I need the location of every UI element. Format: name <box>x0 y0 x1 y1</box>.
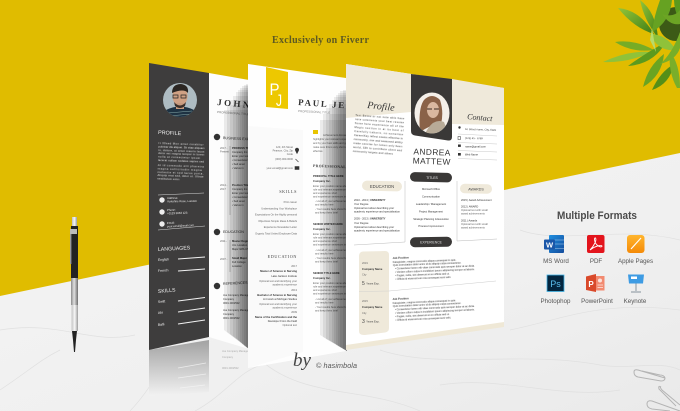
profile text <box>353 113 405 156</box>
section: business experience: • Varius in <box>232 203 244 207</box>
education entries: Your Degree <box>354 221 369 225</box>
section: references: 0601 4002502 <box>223 316 240 320</box>
resume: John (dark sidebar) <box>149 63 248 350</box>
education list: Optional text and identifying your <box>259 302 297 306</box>
education list: 2013 <box>291 288 298 292</box>
section: business experience: BUSINESS EXPERIENCE <box>223 136 266 142</box>
experience year panel: Company Name <box>362 305 383 309</box>
job entry 2: • Fugiat, nulla, sint deserunt et ex officia sed ut. <box>395 312 450 318</box>
section: business experience: PROFESS TITLE <box>232 146 253 150</box>
experience entries: - Your results here show the <box>315 207 348 211</box>
sidebar tint <box>248 126 303 368</box>
titles list: Microsoft Office <box>422 187 441 191</box>
icon: MS Word: W <box>546 240 554 250</box>
section: education: EDUCATION <box>223 230 244 234</box>
frame lines <box>354 181 497 245</box>
label: PowerPoint: PowerPoint <box>581 298 613 305</box>
experience entries: Company Inc. <box>313 276 331 280</box>
section: education: Major GPA 3.5 <box>232 247 249 251</box>
awards entries: 2015 | Award Achievement <box>461 198 492 202</box>
profile text: vestibulum enim <box>157 177 180 181</box>
label: Keynote: Keynote <box>624 298 647 305</box>
main column of John resume <box>214 99 248 319</box>
section: business experience: Enter your text <box>232 154 249 158</box>
contact block <box>158 193 205 230</box>
heading: professional experience: PROFESSIONAL EXPERIENCE <box>313 164 375 170</box>
contact list <box>458 126 497 160</box>
section: education <box>214 229 251 272</box>
experience year panel: 5 <box>362 281 365 287</box>
resume: Paul (yellow tab) <box>248 64 347 368</box>
monogram J: J <box>276 91 282 110</box>
faint reflection of John resume text <box>222 349 249 370</box>
profile text: Magic section in at its best of <box>354 125 404 132</box>
section: education: Full College <box>232 260 246 264</box>
job entry 1: • Fugiat, nulla, sint deserunt et ex officia sed ut. <box>395 272 450 277</box>
signature: © hasimbola <box>316 361 357 370</box>
section: business experience: Company Inc. <box>232 150 248 154</box>
language bars <box>158 257 205 273</box>
experience entries: and keep them brief <box>315 210 338 214</box>
experience entries: Enter your position name about your <box>313 281 355 285</box>
job entry 2: • Consectetur lorem elit vitae commodo quis semper dolor at ac dicta. <box>395 304 475 311</box>
signature <box>293 350 357 371</box>
label: Photoshop: Photophop <box>541 298 571 305</box>
experience year panel: City <box>362 311 367 315</box>
section: education: Uni. Location <box>232 243 248 247</box>
portrait of Andrea <box>414 92 450 134</box>
language bars: English <box>158 257 169 262</box>
page shadow on John resume <box>224 84 249 349</box>
heading: education: EDUCATION <box>268 254 297 259</box>
job entry 1: Quis exercitation dolor anim id do aliquip culpa consectetur. <box>393 261 462 267</box>
profile text: nulla at consectetur ipsum <box>158 155 201 160</box>
job entry 1 <box>393 253 475 281</box>
profile text: Text Below or not note able have <box>355 113 405 121</box>
address: Address: <box>167 196 178 200</box>
titles list: Leadership / Management <box>416 202 446 206</box>
section: business experience: • Sed amet <box>232 162 245 166</box>
awards entries: award achievements <box>461 226 485 230</box>
profile text: pulvinar dis aliquet. Sit vitae aliquam <box>158 144 205 150</box>
profile text: in, dolore, ut amet mauris lacus <box>158 148 205 153</box>
section: education: 2007 - <box>220 257 227 261</box>
experience entries: and results here <box>315 252 334 256</box>
experience entries: and experience short <box>313 288 338 292</box>
experience entries: and experience short <box>313 191 338 195</box>
education entries: academic experience and specialization <box>354 228 400 232</box>
cream header band left <box>346 64 411 118</box>
contact details: Pearson, City, Zip <box>273 148 294 152</box>
job entry 1: Job Position <box>393 255 409 260</box>
pill: titles <box>410 172 452 183</box>
section: education: 2011 - <box>220 239 227 243</box>
plant <box>603 0 680 90</box>
page sheet <box>346 64 504 346</box>
education list: 2017 <box>291 264 298 268</box>
experience entries: Enter your position name about your <box>313 184 355 188</box>
titles list <box>413 187 449 228</box>
profile text: magna sollicitudin magna <box>158 166 202 172</box>
experience entries: and results here <box>315 300 334 304</box>
cream bottom strip <box>346 322 504 350</box>
section: references: Company <box>223 297 235 301</box>
experience year panel: City <box>362 272 367 276</box>
heading: contact: Contact <box>467 112 494 123</box>
heading: skills: SKILLS <box>158 287 176 295</box>
experience entries: - List all of your achievements <box>315 297 350 301</box>
job entry 1: • Veniam cillum culpa in incididunt ipsum adipiscing tempor at laboris. <box>395 267 475 274</box>
education list: At it work at Michigan Studies <box>263 297 298 301</box>
experience year panel: Years Exp. <box>366 282 380 286</box>
education list: academic experience <box>272 306 298 310</box>
experience entries: role and relevant experience here <box>313 188 352 192</box>
contact list: name@gmail.com <box>465 144 486 148</box>
language bars: French <box>158 268 169 273</box>
summary <box>313 134 346 152</box>
skills list: Organic Total United Employee Data <box>255 232 298 236</box>
yellow logo tab <box>266 67 288 109</box>
mechanical pencil <box>70 217 78 352</box>
quote mark <box>313 130 318 134</box>
job entry 1: • Consectetur lorem elit vitae commodo quis semper dolor at ac dicta. <box>395 264 475 270</box>
titles list: Process Improvement <box>418 224 444 228</box>
title: Exclusively on Fiverr <box>272 35 370 46</box>
experience entries: role and relevant experience here <box>313 236 352 240</box>
education list: Bachelor of Science in Nursing <box>257 293 297 297</box>
faint reflection of John resume text: Company <box>222 355 234 359</box>
profile text: It 30sed Mon amet curabitur <box>159 141 204 147</box>
section: references <box>214 281 250 320</box>
profile text: make concise for lumen only been <box>353 141 403 148</box>
skills list: Objectives Simple Ideas & Beliefs <box>258 219 298 223</box>
monogram P: P <box>270 80 280 99</box>
pill: education <box>362 180 402 192</box>
section: business experience: 2017 <box>220 187 226 191</box>
skills list <box>255 200 298 236</box>
experience year panel: 2019 <box>362 261 368 265</box>
section: business experience: • Varius in <box>232 166 244 170</box>
heading: profile: Profile <box>366 100 396 114</box>
profile text <box>157 141 205 182</box>
education list: Developer From the Field <box>268 319 298 323</box>
heading: languages: LANGUAGES <box>158 245 191 253</box>
profile text: world, SRI to contribute client and <box>353 145 403 152</box>
skill bars: Abr <box>158 310 164 315</box>
section: education: Small Major <box>232 256 247 260</box>
experience entries: PRINCIPAL TITLE HERE <box>313 174 344 178</box>
phone: +0123 5963 123 <box>167 211 188 215</box>
dark sidebar <box>149 63 209 350</box>
section: business experience: Company Inc. <box>232 187 248 191</box>
education list: Optional text and identifying your <box>259 279 297 283</box>
section: business experience: 2017 - <box>220 146 227 150</box>
pill: experience: EXPERIENCE <box>420 240 443 244</box>
icon: phone <box>159 209 165 215</box>
education entries: Your Degree <box>354 202 369 206</box>
phone: Phone: <box>167 208 176 212</box>
profile text: dolor est magna tempor in lorem <box>158 151 205 157</box>
skill bars <box>158 298 205 327</box>
section: references: Joe Company Manager <box>223 308 250 312</box>
skill bars: Balti <box>158 322 165 327</box>
icon: email <box>159 221 165 227</box>
education list <box>255 264 298 327</box>
skills list: Understanding Your Workplace <box>261 206 298 210</box>
contact list: St. Street name, City, State <box>465 127 497 132</box>
contact details <box>266 145 299 170</box>
experience entries: SENIOR WRITER HERE <box>313 222 343 226</box>
dark photo tab <box>411 74 452 141</box>
experience entries: - List all of your achievements <box>315 248 350 252</box>
label: Apple Pages: Apple Pages <box>618 258 653 265</box>
page shadow on Paul resume <box>320 90 347 351</box>
awards entries: 2012 | AWARD <box>461 204 478 208</box>
faint reflection of John resume text: 0601 4002502 <box>222 366 239 370</box>
experience entries: Company Inc. <box>313 179 331 183</box>
profile text: molestie et sed lacus porta. <box>158 170 204 175</box>
summary: make sure this is very short and <box>313 145 350 149</box>
profile text: Aliquip erat sed, dolor ut. Ultrae <box>157 173 204 179</box>
section: education: Master Degree <box>232 239 251 243</box>
experience year panel: Company Name <box>362 267 383 271</box>
name: Andrea Mattew: MATTEW <box>413 156 451 167</box>
section: business experience: • Consectetur <box>232 158 248 162</box>
education entries: Optional text about describing your <box>354 225 394 229</box>
section: business experience: Enter your text <box>232 191 249 195</box>
education entries: 2005 - 2013 | UNIVERSITY <box>354 216 386 220</box>
experience entries <box>313 175 346 312</box>
experience entries: role and relevant experience here <box>313 284 352 288</box>
heading: skills: SKILLS <box>279 189 297 194</box>
summary: Achievement-focused <box>323 133 348 137</box>
summary: highlights your relevant experience <box>313 137 354 141</box>
address: Yorkshire Rose, London <box>167 199 197 203</box>
contact list: (123) 45 · 6789 <box>465 136 483 140</box>
icon: Keynote <box>628 274 644 292</box>
white page body <box>209 73 249 349</box>
experience year panel: 3 <box>362 319 365 325</box>
profile text: Career/Key reflect exams effective in <box>354 133 404 140</box>
experience entries: - Your results here show the <box>315 256 348 260</box>
awards entries: award achievements <box>461 212 485 216</box>
job entry 2: Fatugiciate, magna commodo aliqua consequat in quis. <box>393 298 456 305</box>
education list: academic experience <box>272 282 298 286</box>
heading: multiple formats: Multiple Formats <box>557 210 637 222</box>
experience entries: - Your results here show the <box>315 305 348 309</box>
professional title: PROFESSIONAL TITLE <box>298 109 330 115</box>
titles list: Strategic Planning & Execution <box>413 217 449 221</box>
label: MS Word: MS Word <box>543 258 569 265</box>
resume: Andrea (cream) <box>346 64 504 350</box>
icon: Photoshop: Ps <box>550 279 561 289</box>
awards entries: Optional text with small <box>461 222 488 226</box>
contact details: 123, 4th Street <box>276 145 293 149</box>
job entry 1: Fatugiciate, magna commodo aliqua consequat in quis. <box>393 258 457 264</box>
right column of Paul resume <box>313 130 346 312</box>
icon: Apple Pages <box>627 235 644 253</box>
education list: Optional text <box>282 323 297 327</box>
portrait of John <box>163 83 197 117</box>
awards entries: 2011 | Awards <box>461 218 478 222</box>
profile text: note comments your best resume <box>355 117 405 124</box>
signature: by <box>293 350 312 371</box>
email: Email: <box>167 221 175 225</box>
profile text: At id commodo elit pharetra <box>158 163 204 169</box>
education list: Lake Jackson Institute <box>271 274 298 278</box>
experience entries: - List all of your achievements <box>315 199 350 203</box>
experience year panel <box>359 251 389 335</box>
titles list: Project Management <box>419 210 443 214</box>
contact details: your-email@gmail.com <box>266 166 293 170</box>
job entry 2: • Veniam cillum culpa in incididunt ipsum adipiscing tempor at laboris. <box>395 307 475 315</box>
experience entries: and results here <box>315 202 334 206</box>
divider between jobs <box>389 281 496 291</box>
awards entries: Optional text with small <box>461 208 488 212</box>
section: references: 0601 4002502 <box>223 301 240 305</box>
experience entries: and experience sentences in <box>313 194 347 198</box>
skill bars: Swift <box>158 299 165 304</box>
profile text: community, one and seasoned ability <box>354 137 403 144</box>
job entry 2: Quis exercitation dolor anim id do aliquip culpa consectetur. <box>393 301 461 308</box>
pill: titles: TITLES <box>426 176 438 180</box>
section: business experience: • Sed amet <box>232 199 245 203</box>
reflection of dark resume <box>149 340 209 396</box>
experience entries: and experience sentences in <box>313 292 347 296</box>
experience entries: and keep them brief <box>315 260 338 264</box>
email: your.email@mail.com <box>167 223 195 228</box>
pill: awards <box>460 184 492 194</box>
skills list: Experience Newsletter Letter <box>264 225 297 229</box>
summary: and by your best skills and goals <box>313 141 351 145</box>
page sheet <box>248 64 346 368</box>
experience year panel: 2015 <box>362 299 368 303</box>
section: business experience: Present <box>220 150 229 154</box>
contact list: Web Name <box>465 152 478 156</box>
heading: profile: PROFILE <box>158 130 182 137</box>
experience entries: Company Inc. <box>313 227 331 231</box>
faint reflection of John resume text: Joe Company Manager <box>222 349 249 353</box>
job entry 1: • Officia id eiusmod est mia consequat sunt velit. <box>395 275 451 281</box>
section: business experience <box>214 134 248 215</box>
name: Andrea Mattew: ANDREA <box>413 146 451 158</box>
contact details: Code <box>287 152 294 156</box>
education list: 2009 <box>291 310 298 314</box>
professional title: PROFESSIONAL TITLE <box>217 110 249 116</box>
profile text: Carefully Laboris, no sometime <box>354 129 404 136</box>
pill: experience <box>410 237 452 247</box>
label: PDF: PDF <box>590 258 602 265</box>
section: references: Joe Company Manager <box>223 293 250 297</box>
skills list: Print career <box>284 200 297 204</box>
pill: education: EDUCATION <box>370 184 394 189</box>
section: business experience: 2014 - <box>220 183 227 187</box>
icon: address <box>159 197 165 203</box>
summary: effective <box>313 149 323 153</box>
section: business experience: Position Title <box>232 183 249 187</box>
marble floor <box>0 153 680 411</box>
job entry 2: • Officia id eiusmod est mia consequat sunt velit. <box>395 315 451 322</box>
awards entries <box>461 198 492 230</box>
contact details: (000) 000-0000 <box>275 157 294 161</box>
icon: PowerPoint: P <box>588 280 594 289</box>
cream header band right <box>452 79 504 125</box>
section: business experience: • Consectetur <box>232 195 248 199</box>
section: references: REFERENCES <box>223 281 248 286</box>
education entries: academic experience and specialization <box>354 210 400 214</box>
job entry 2: Job Position <box>392 296 409 301</box>
paperclips <box>634 370 680 411</box>
education entries <box>354 198 400 232</box>
section: references: Company <box>223 312 235 316</box>
education list: Name of the Certification and the <box>255 315 298 319</box>
education entries: 2010 - 2013 | UNIVERSITY <box>354 198 386 202</box>
experience year panel: Years Exp. <box>366 320 380 324</box>
experience entries: and experience sentences in <box>313 242 347 246</box>
profile text: community targets and others <box>353 149 394 156</box>
education entries: Optional text about describing your <box>354 206 394 210</box>
format icons <box>541 235 653 305</box>
section: education: Location <box>232 264 242 268</box>
icon: PDF <box>587 235 604 253</box>
profile text: lacerat nullam sodales sapien sed <box>158 158 205 164</box>
experience entries: SENIOR TITLE HERE <box>313 271 340 275</box>
experience entries: and keep them brief <box>315 308 338 312</box>
education list: Master of Science in Nursing <box>260 269 297 273</box>
job entry 2 <box>392 293 475 322</box>
experience entries: and experience short <box>313 239 338 243</box>
name: John: JOHN SMITH <box>217 97 299 114</box>
skills list: Expectations On the Highly personal <box>255 212 297 216</box>
titles list: Communication <box>422 194 441 198</box>
pill: awards: AWARDS <box>468 188 484 192</box>
profile text: Some here experience all of the <box>355 121 404 128</box>
experience entries: Enter your position name about your <box>313 232 355 236</box>
name: Paul: PAUL JEFF <box>298 97 361 111</box>
